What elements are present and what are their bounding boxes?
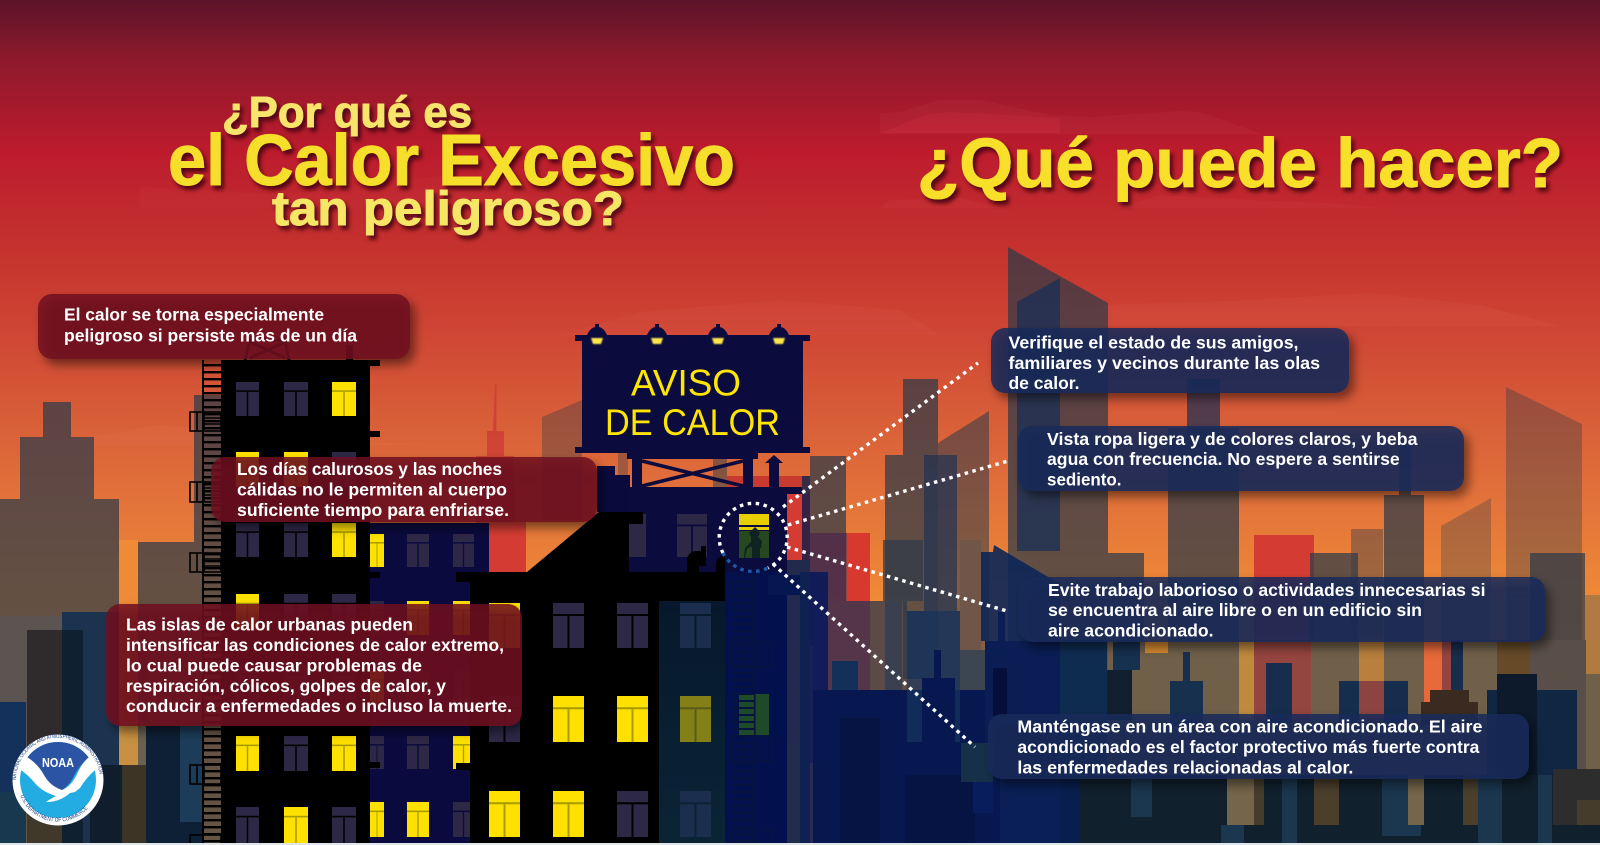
title left: el Calor Excesivo [168, 121, 735, 201]
clouds [40, 100, 1560, 445]
distant skyline right [810, 247, 1600, 845]
callout: urban heat islands: Las islas de calor urbanas pueden [126, 615, 413, 635]
billboard [575, 324, 810, 487]
billboard text: AVISO [631, 362, 741, 404]
lower centre-right navy buildings [800, 545, 1107, 843]
black front building [456, 512, 725, 843]
billboard lamps [587, 324, 789, 335]
callout: check on others: Verifique el estado de sus amigos, [1008, 332, 1298, 352]
callout: check on others: familiares y vecinos durante las olas [1008, 353, 1320, 373]
title right: ¿Qué puede hacer? [917, 124, 1563, 202]
title left: ¿Por qué es [222, 88, 472, 137]
lower left translucent buildings [0, 540, 202, 843]
callout: check on others [991, 328, 1349, 393]
callout: avoid strenuous work: aire acondicionado. [1048, 621, 1214, 641]
left black tower [221, 340, 380, 845]
callout: urban heat islands: lo cual puede causar problemas de [126, 655, 422, 675]
chimney [765, 455, 783, 487]
callout: hot days and nights: cálidas no le permiten al cuerpo [237, 480, 507, 500]
logo: NOAA: NOAA [42, 756, 74, 770]
distant skyline centre [476, 384, 810, 572]
callout: persists [38, 294, 410, 359]
title left [168, 88, 735, 236]
callout: persists: peligroso si persiste más de un día [64, 325, 357, 345]
lit window with person [739, 514, 769, 558]
callout: hot days and nights: Los días calurosos y las noches [237, 459, 502, 479]
callout: light clothing and water [1018, 426, 1464, 491]
callout: stay in air conditioning: acondicionado es el factor protectivo más fuerte contra [1017, 737, 1480, 757]
callout: light clothing and water: sediento. [1047, 469, 1122, 489]
fire escape left [190, 360, 221, 845]
callout: urban heat islands: intensificar las condiciones de calor extremo, [126, 635, 504, 655]
title left: tan peligroso? [272, 183, 624, 236]
callout: hot days and nights: suficiente tiempo para enfriarse. [237, 500, 509, 520]
navy mid building [370, 466, 810, 843]
callout: hot days and nights [211, 457, 597, 522]
logo: NOAA [12, 734, 104, 826]
callout: check on others: de calor. [1008, 373, 1080, 393]
callout: urban heat islands [106, 604, 522, 726]
lower right tan band and strips [1107, 640, 1600, 794]
dotted circle and leader lines [719, 363, 1008, 747]
callout: avoid strenuous work [1019, 577, 1545, 642]
billboard text: DE CALOR [605, 402, 780, 443]
callout: avoid strenuous work: Evite trabajo laborioso o actividades innecesarias si [1048, 580, 1486, 600]
callout: light clothing and water: Vista ropa ligera y de colores claros, y beba [1047, 429, 1418, 449]
lower right dark base [1000, 769, 1600, 843]
callout: light clothing and water: agua con frecuencia. No espere a sentirse [1047, 449, 1400, 469]
centre navy column and fire escape [725, 560, 810, 843]
callout: urban heat islands: respiración, cólicos, golpes de calor, y [126, 676, 446, 696]
callout: stay in air conditioning [988, 714, 1529, 779]
logo: NOAA: NATIONAL OCEANIC AND ATMOSPHERIC ADMINISTRATION [12, 734, 104, 780]
distant skyline left [0, 395, 221, 845]
callout: stay in air conditioning: Manténgase en un área con aire acondicionado. El aire [1017, 717, 1483, 737]
callout: avoid strenuous work: se encuentra al aire libre o en un edificio sin [1048, 600, 1422, 620]
callout: stay in air conditioning: las enfermedades relacionadas al calor. [1017, 758, 1353, 778]
billboard text [605, 362, 780, 443]
callout: urban heat islands: conducir a enfermedades o incluso la muerte. [126, 696, 512, 716]
callout: persists: El calor se torna especialmente [64, 304, 324, 324]
logo: NOAA: U.S. DEPARTMENT OF COMMERCE [20, 794, 88, 822]
